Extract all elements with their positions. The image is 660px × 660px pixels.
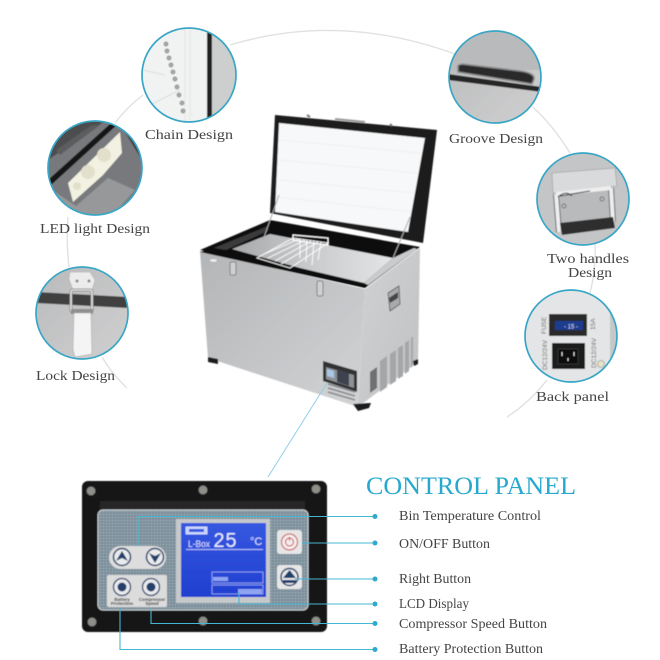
label: groove design: Groove Design — [449, 131, 543, 146]
label: chain design: Chain Design — [145, 127, 233, 142]
detail circle: back panel: 15A — [590, 318, 597, 330]
detail circle: back panel: DC12/24V — [542, 339, 549, 370]
wire basket — [257, 235, 328, 268]
detail circle: LED light — [46, 120, 146, 220]
lid support wires — [263, 195, 410, 258]
battery and compressor buttons: Protection — [111, 601, 133, 606]
fridge photo — [200, 115, 437, 411]
legend labels — [399, 508, 547, 656]
battery and compressor buttons — [107, 575, 167, 607]
legend labels: Right Button — [399, 571, 471, 586]
detail circle: back panel: FUSE — [541, 316, 548, 334]
legend labels: ON/OFF Button — [399, 536, 490, 551]
label: back panel: Back panel — [536, 389, 609, 404]
heading: control panel: CONTROL PANEL — [366, 473, 576, 500]
battery and compressor buttons: Battery — [114, 597, 130, 602]
detail circle: chain — [140, 26, 242, 126]
control panel photo — [82, 481, 327, 632]
label: lock design: Lock Design — [36, 368, 115, 383]
legend labels: LCD Display — [399, 596, 469, 611]
legend labels: Bin Temperature Control — [399, 508, 541, 523]
label: two handles design: Two handles — [547, 251, 629, 266]
legend labels: Battery Protection Button — [399, 641, 543, 656]
cabinet front — [200, 251, 365, 407]
connecting grey arc around the fridge — [67, 30, 595, 417]
black housing — [82, 481, 327, 632]
detail circle: groove — [448, 30, 542, 124]
detail circle: lock — [36, 267, 128, 359]
feet — [208, 357, 418, 411]
side vents — [370, 336, 413, 393]
faceplate — [98, 510, 308, 610]
battery and compressor buttons: Compressor — [139, 597, 165, 602]
label: LED light design: LED light Design — [40, 221, 150, 236]
detail circle: handles — [536, 152, 630, 246]
cabinet interior — [200, 220, 420, 288]
open lid — [270, 115, 437, 243]
mini control panel — [323, 361, 357, 400]
leader line from fridge to control panel — [268, 383, 327, 477]
power button — [277, 530, 302, 554]
detail circle: back panel: DC12/24V — [591, 337, 598, 368]
battery and compressor buttons: Speed — [145, 601, 159, 606]
leader lines and dots — [120, 514, 378, 652]
detail circle: back panel — [524, 290, 618, 384]
latches and side handle — [210, 259, 400, 311]
temperature up and down buttons — [109, 546, 166, 569]
legend labels: Compressor Speed Button — [399, 616, 547, 631]
LCD display: 25 — [213, 531, 237, 554]
cabinet right side — [358, 248, 420, 407]
LCD display: L-Box — [188, 539, 210, 549]
LCD display — [176, 519, 270, 603]
detail circle: back panel: - 15 - — [564, 324, 578, 330]
label: two handles design — [547, 251, 629, 280]
LCD display: °C — [250, 536, 262, 548]
right button — [277, 565, 302, 589]
label: two handles design: Design — [568, 265, 612, 280]
screws — [86, 484, 320, 626]
